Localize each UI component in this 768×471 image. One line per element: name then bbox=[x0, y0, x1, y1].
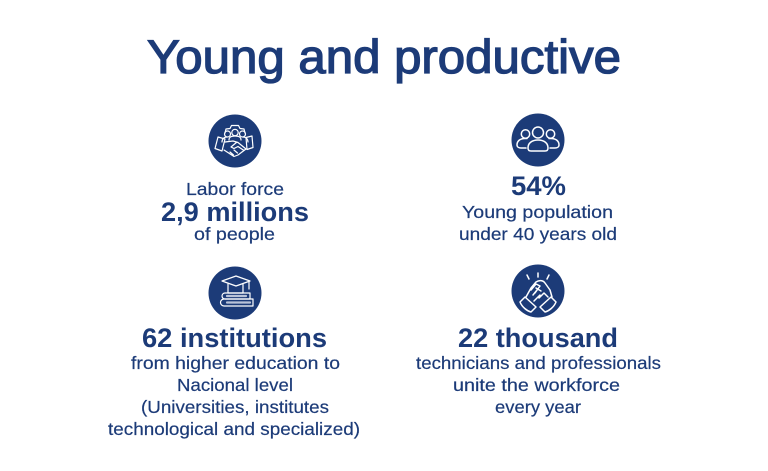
label: labor force: Labor force bbox=[186, 179, 284, 199]
text: unite the workforce: unite the workforce bbox=[453, 375, 620, 395]
panel: technicians and professionals bbox=[416, 264, 661, 417]
text: technological and specialized: technological and specialized) bbox=[108, 419, 360, 439]
panel: institutions bbox=[108, 266, 360, 439]
icon: clasped hands bbox=[512, 264, 564, 318]
figure: 62 institutions: 62 institutions bbox=[142, 323, 327, 353]
label: young population: Young population bbox=[462, 202, 613, 222]
text: technicians and professionals: technicians and professionals bbox=[416, 353, 661, 373]
figure: 54%: 54% bbox=[511, 171, 566, 201]
text: every year: every year bbox=[495, 397, 581, 417]
icon: handshake and team bbox=[208, 114, 262, 168]
text: Nacional level: Nacional level bbox=[177, 375, 293, 395]
label: under 40 years old: under 40 years old bbox=[459, 224, 617, 244]
figure: 2,9 millions: 2,9 millions bbox=[161, 197, 309, 227]
text: from higher education to: from higher education to bbox=[131, 353, 340, 373]
panel: young population bbox=[459, 114, 617, 244]
icon: group of people bbox=[512, 114, 564, 166]
text: universities, institutes: (Universities, institutes bbox=[141, 397, 329, 417]
title: Young and productive bbox=[147, 30, 621, 83]
panel: labor force bbox=[161, 114, 309, 244]
icon: graduation cap on books bbox=[208, 266, 262, 320]
label: of people: of people bbox=[194, 224, 275, 244]
figure: 22 thousand: 22 thousand bbox=[458, 323, 618, 353]
